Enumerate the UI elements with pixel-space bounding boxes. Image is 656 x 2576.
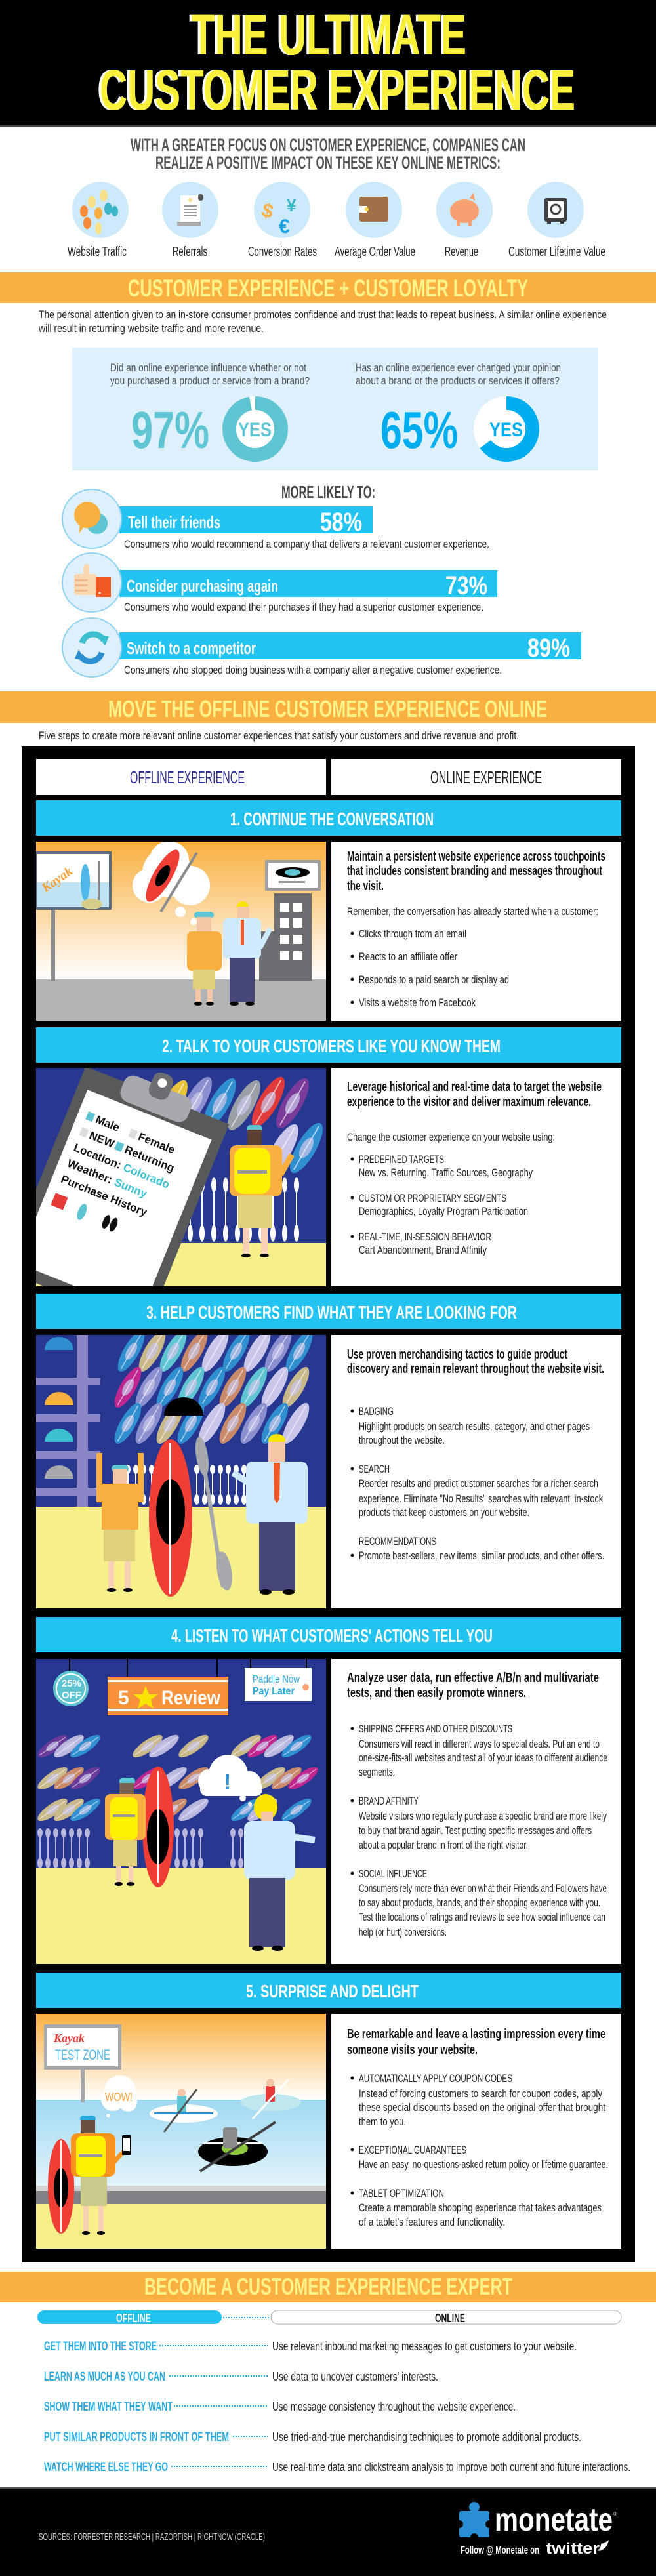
donut 97: [230, 403, 281, 455]
icon: website traffic: [72, 182, 129, 238]
question 2: Has an online experience ever changed your opinion: [356, 361, 561, 374]
icon: conversion rates: $: [259, 199, 276, 223]
donut 65: YES: [489, 419, 523, 441]
hanging signs: Pay Later: [253, 1686, 295, 1697]
expert tips list: [44, 2340, 630, 2474]
step 4 text: tests, and then easily promote winners.: [347, 1686, 526, 1700]
offline/online legend pills: [37, 2310, 621, 2325]
twitter follow: [461, 2540, 609, 2558]
clipboard: Female: [136, 1130, 176, 1156]
clipboard: NEW: [87, 1129, 117, 1151]
step 1 text: Visits a website from Facebook: [359, 996, 476, 1009]
bar: tell their friends: Tell their friends: [128, 512, 220, 532]
step 1 heading: [36, 800, 621, 836]
icon: referrals: [162, 182, 218, 238]
metric icons row: [68, 182, 605, 259]
shopper with backpack: [230, 1125, 292, 1257]
step 5 heading: 5. SURPRISE AND DELIGHT: [246, 1981, 419, 2001]
step 4 text: BRAND AFFINITY: [359, 1795, 419, 1807]
icon: refresh arrows: [62, 618, 121, 677]
bar: switch to a competitor: Consumers who stopped doing business with a company after a negative customer experience.: [124, 664, 502, 676]
step 2 text: Change the customer experience on your website using:: [347, 1131, 555, 1143]
customer: [187, 912, 222, 1006]
section header: become an expert: [0, 2272, 656, 2302]
expert tips list: Use data to uncover customers' interests.: [272, 2370, 438, 2383]
step 5 text: AUTOMATICALLY APPLY COUPON CODES: [359, 2072, 512, 2085]
clipboard: Location: Colorado: [72, 1141, 171, 1191]
monetate logo: monetate: [495, 2501, 613, 2538]
clipboard: Purchase History: [59, 1173, 149, 1219]
step 5 illustration: [36, 2014, 326, 2249]
step 5 text: TABLET OPTIMIZATION: [359, 2187, 444, 2199]
hanging signs: 25%: [62, 1678, 81, 1689]
metric labels: Referrals: [173, 245, 207, 259]
column header: online: ONLINE EXPERIENCE: [430, 767, 542, 787]
step 3 text: products that keep customers on your website.: [359, 1506, 529, 1519]
wow cloud: [101, 2075, 137, 2117]
step 2 text: New vs. Returning, Traffic Sources, Geography: [359, 1166, 533, 1179]
step 5 text: EXCEPTIONAL GUARANTEES: [359, 2144, 466, 2156]
step 2 heading: [36, 1027, 621, 1063]
step 3 text: [331, 1335, 621, 1608]
expert tips list: SHOW THEM WHAT THEY WANT: [44, 2400, 173, 2414]
paddles: [125, 1465, 247, 1505]
hanging signs: Paddle Now: [253, 1674, 300, 1685]
title: THE ULTIMATE: [192, 3, 466, 67]
shopper with red kayak: [105, 1767, 174, 1887]
step 1 heading: 1. CONTINUE THE CONVERSATION: [230, 809, 434, 829]
step 4 heading: 4. LISTEN TO WHAT CUSTOMERS' ACTIONS TELL YOU: [171, 1625, 493, 1646]
question 1: [110, 361, 310, 387]
paddles: [188, 1177, 299, 1242]
step 5 text: someone visits your website.: [347, 2043, 478, 2057]
step 2 heading: 2. TALK TO YOUR CUSTOMERS LIKE YOU KNOW THEM: [162, 1036, 501, 1056]
metric labels: Revenue: [445, 245, 478, 259]
five steps intro: Five steps to create more relevant online customer experiences that satisfy your customers and drive revenue and profit.: [39, 729, 519, 742]
bar: consider purchasing again: Consider purchasing again: [127, 576, 278, 596]
billboard: [34, 851, 112, 910]
metric labels: Website Traffic: [68, 245, 127, 259]
step 4 text: [331, 1659, 621, 1964]
twitter follow: Follow @ Monetate on: [461, 2544, 539, 2556]
expert tips list: LEARN AS MUCH AS YOU CAN: [44, 2370, 165, 2384]
icon: average order value: [346, 182, 402, 238]
test zone sign: TEST ZONE: [55, 2047, 110, 2063]
offline/online legend pills: OFFLINE: [116, 2312, 151, 2325]
step 4 heading: [36, 1617, 621, 1652]
hanging signs: OFF: [62, 1690, 81, 1701]
step 2 illustration: [36, 1068, 326, 1286]
step 2 text: Cart Abandonment, Brand Affinity: [359, 1244, 487, 1256]
clipboard: Returning: [123, 1143, 176, 1175]
icon: thumbs up: [62, 553, 121, 612]
step 4 text: segments.: [359, 1766, 395, 1778]
metric labels: Conversion Rates: [248, 245, 317, 259]
kayak wall: [35, 1731, 321, 1825]
paddles: [37, 1828, 243, 1868]
monetate logo: ®: [613, 2511, 617, 2517]
step 3 illustration: [36, 1328, 326, 1608]
step 5 text: [331, 2014, 621, 2249]
expert tips list: WATCH WHERE ELSE THEY GO: [44, 2461, 168, 2474]
bar: switch to a competitor: [62, 618, 581, 677]
footer: [0, 2487, 656, 2576]
bar: consider purchasing again: 73%: [445, 571, 487, 600]
twitter follow: twitter: [546, 2540, 600, 2558]
icon: customer lifetime value: [527, 182, 584, 238]
question 2: about a brand or the products or services it offers?: [356, 375, 560, 387]
hanging signs: [53, 1659, 312, 1715]
heading: more likely to: MORE LIKELY TO:: [281, 482, 375, 502]
stat 97%: 97%: [131, 401, 209, 459]
store building: [259, 860, 321, 981]
salesperson: [223, 901, 270, 1006]
step 3 text: RECOMMENDATIONS: [359, 1535, 436, 1547]
bar: tell their friends: [62, 489, 489, 550]
kayak wall: [171, 1077, 323, 1173]
kayak wall: [114, 1335, 312, 1444]
clipboard: [36, 1068, 230, 1286]
icon: revenue: [436, 182, 493, 238]
metric labels: Average Order Value: [335, 245, 415, 259]
step 1 text: [331, 842, 621, 1021]
salesperson: [244, 1794, 315, 1951]
step 3 heading: [36, 1294, 621, 1329]
bar: consider purchasing again: [62, 553, 497, 613]
shopper with tablet: [48, 2116, 131, 2235]
step 2 text: CUSTOM OR PROPRIETARY SEGMENTS: [359, 1192, 506, 1204]
step 4 text: about a popular brand in front of the right visitor.: [359, 1839, 528, 1851]
step 3 text: SEARCH: [359, 1463, 390, 1475]
step 3 text: BADGING: [359, 1405, 394, 1418]
billboard: Kayak: [39, 864, 75, 896]
step 5 text: them to you.: [359, 2116, 406, 2128]
header band: [0, 0, 656, 127]
helmet rack: [36, 1335, 203, 1507]
step 1 text: Reacts to an affiliate offer: [359, 951, 457, 963]
test zone sign: Kayak: [53, 2032, 85, 2045]
kayakers on water: [150, 2079, 301, 2171]
step 4 text: SHIPPING OFFERS AND OTHER DISCOUNTS: [359, 1723, 512, 1735]
hanging signs: Review: [161, 1687, 221, 1709]
donut 97: YES: [238, 419, 272, 441]
column header: online: [331, 759, 621, 795]
donut 65: [480, 403, 533, 455]
icon: conversion rates: ¥: [287, 195, 297, 215]
bar: switch to a competitor: Switch to a competitor: [127, 638, 256, 658]
bar: tell their friends: Consumers who would recommend a company that delivers a relevant customer experience.: [124, 538, 489, 550]
icon: conversion rates: €: [279, 216, 290, 237]
step 4 text: help (or hurt) conversions.: [359, 1926, 447, 1938]
icon: speech bubbles: [62, 489, 121, 548]
wow cloud: WOW!: [105, 2091, 133, 2104]
step 2 text: [331, 1068, 621, 1286]
step 4 illustration: [35, 1659, 326, 1964]
step 2 text: Demographics, Loyalty Program Participation: [359, 1205, 528, 1217]
step 1 illustration: [34, 841, 326, 1021]
sources: SOURCES: FORRESTER RESEARCH | RAZORFISH | RIGHTNOW (ORACLE): [39, 2531, 265, 2543]
cheering customer: [96, 1453, 144, 1592]
intro text: will result in returning website traffic and more revenue.: [38, 322, 264, 335]
metric labels: Customer Lifetime Value: [508, 245, 605, 259]
intro text: [38, 308, 607, 335]
subtitle: [131, 135, 525, 173]
panel: survey stats: [72, 348, 598, 470]
bar: consider purchasing again: Consumers who would expand their purchases if they had a superior customer experience.: [124, 601, 483, 613]
test zone sign: [44, 2024, 121, 2102]
step 2 text: PREDEFINED TARGETS: [359, 1153, 444, 1166]
red kayak and paddle: [149, 1436, 235, 1597]
hanging signs: 5: [118, 1687, 129, 1709]
offline/online legend pills: ONLINE: [435, 2312, 465, 2325]
thought bubble: !: [224, 1770, 231, 1795]
step 3 text: throughout the website.: [359, 1434, 445, 1446]
step 1 text: Responds to a paid search or display ad: [359, 973, 509, 986]
bar: tell their friends: 58%: [320, 508, 362, 537]
expert tips list: GET THEM INTO THE STORE: [44, 2340, 157, 2354]
metric labels: [68, 245, 605, 259]
title: THE ULTIMATE: [189, 3, 464, 67]
question 2: [356, 361, 561, 387]
step 1 text: Clicks through from an email: [359, 928, 466, 940]
step 5 heading: [36, 1973, 621, 2008]
thought cloud kayak: [133, 841, 210, 925]
step 5 text: of a tablet's features and functionality.: [359, 2216, 505, 2228]
panel: five steps: [3, 746, 635, 2262]
step 1 text: the visit.: [347, 879, 384, 893]
expert tips list: PUT SIMILAR PRODUCTS IN FRONT OF THEM: [44, 2430, 229, 2444]
step 4 text: SOCIAL INFLUENCE: [359, 1868, 427, 1880]
salesperson: [233, 1434, 308, 1595]
expert tips list: Use message consistency throughout the website experience.: [272, 2400, 516, 2413]
column header: offline: [36, 759, 326, 795]
question 1: you purchased a product or service from a brand?: [110, 375, 310, 387]
question 1: Did an online experience influence whether or not: [110, 361, 306, 374]
title: [97, 3, 575, 122]
clipboard: Weather: Sunny: [66, 1157, 149, 1200]
clipboard: Male: [94, 1113, 121, 1134]
bar: switch to a competitor: 89%: [527, 634, 570, 663]
stat 65%: 65%: [380, 401, 458, 459]
column header: offline: OFFLINE EXPERIENCE: [130, 767, 245, 787]
step 2 text: REAL-TIME, IN-SESSION BEHAVIOR: [359, 1231, 491, 1243]
icon: conversion rates: [254, 182, 310, 238]
thought bubble: [198, 1755, 262, 1806]
section header: become an expert: BECOME A CUSTOMER EXPERIENCE EXPERT: [144, 2273, 512, 2300]
monetate logo: [455, 2501, 617, 2541]
